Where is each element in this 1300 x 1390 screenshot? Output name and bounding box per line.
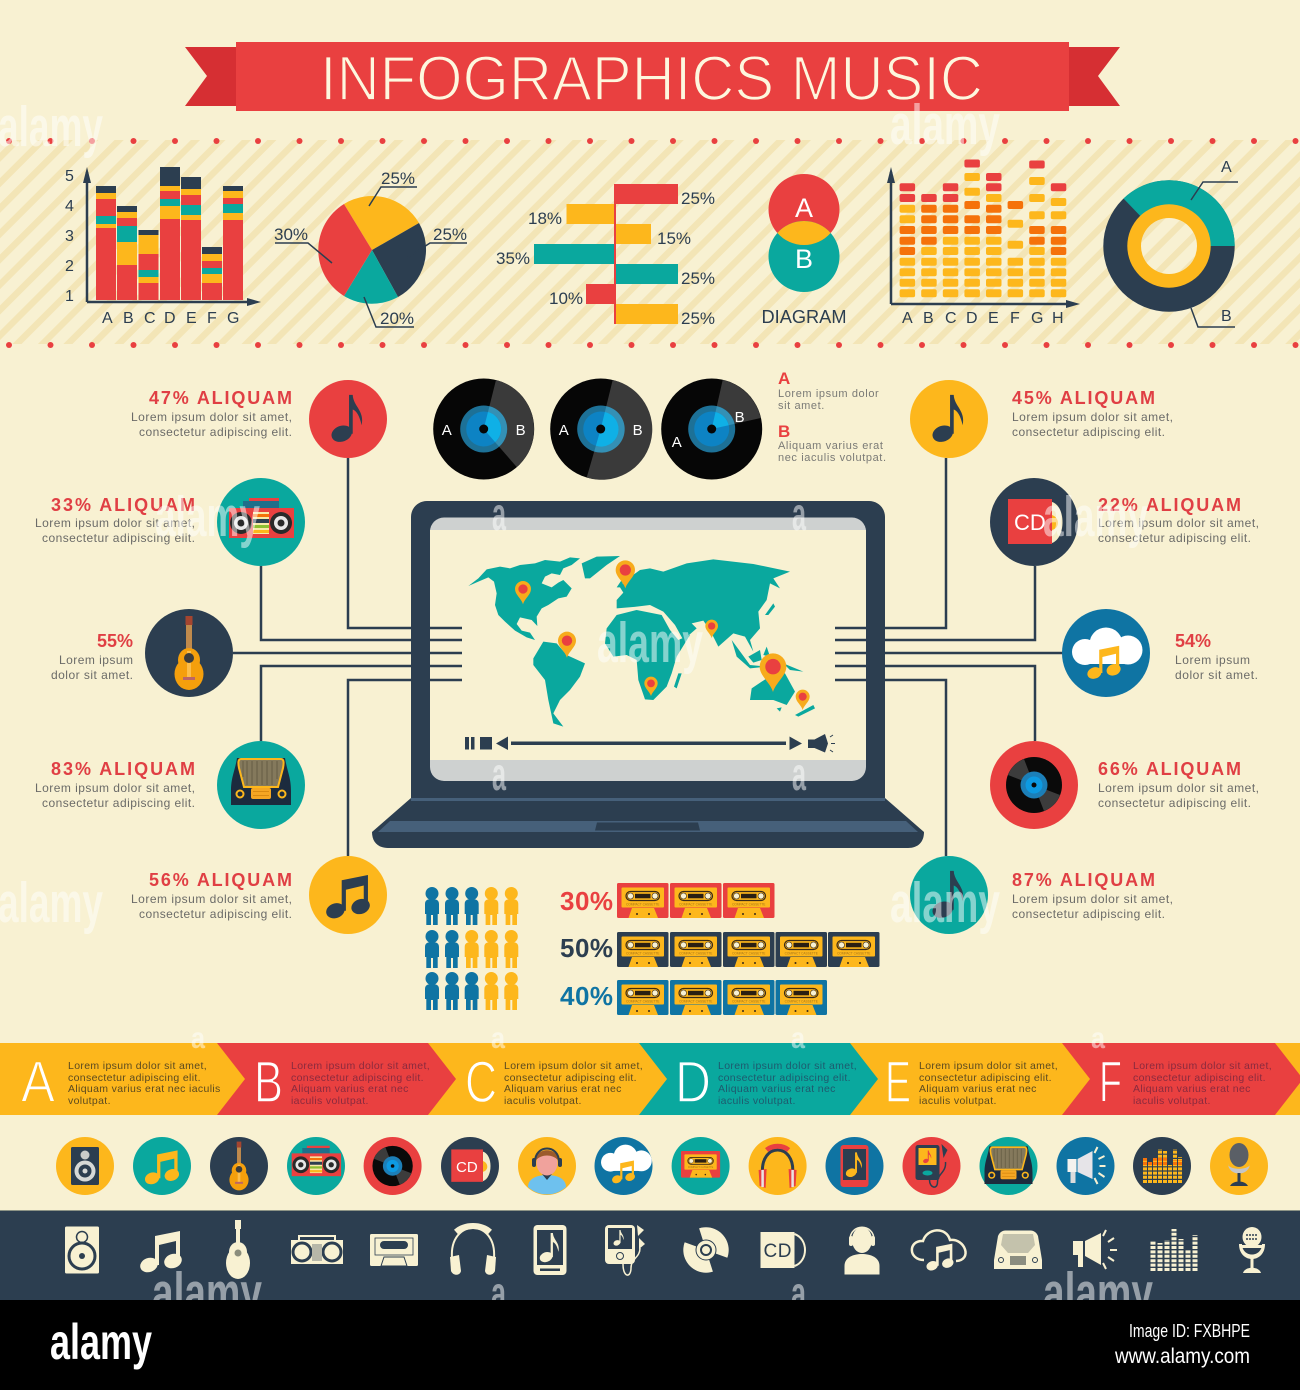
right item 1: 45% ALIQUAM: [1012, 388, 1155, 408]
arrow text F: Aliquam varius erat nec: [1133, 1083, 1251, 1095]
diverging bar chart: 10%: [549, 289, 583, 308]
icon: headphones outline: [450, 1226, 496, 1275]
left item 4: consectetur adipiscing elit.: [42, 796, 195, 810]
icon: music notes: [143, 1150, 181, 1186]
stacked bar chart: 3: [65, 228, 74, 245]
icon: person: [528, 1148, 566, 1194]
cassette row 30%: [560, 883, 774, 918]
arrow band A-F: B: [254, 1050, 283, 1115]
vinyl comparison discs: [433, 378, 762, 480]
stacked bar chart: 2: [65, 258, 74, 275]
vinyl 3: A: [672, 434, 682, 451]
icon: radio outline: [994, 1230, 1042, 1269]
stock watermarks: [0, 93, 1153, 1325]
equalizer chart: [887, 160, 1080, 327]
icon: cassette outline: [370, 1234, 418, 1266]
stock watermarks: a: [1091, 1022, 1105, 1055]
arrow band A-F: F: [1099, 1050, 1122, 1115]
laptop screen: [430, 518, 866, 781]
donut chart: B: [1221, 308, 1232, 325]
diverging bar chart: 18%: [528, 209, 562, 228]
stacked bar chart: B: [123, 310, 134, 327]
icon: megaphone outline: [1073, 1230, 1117, 1269]
icon: microphone outline: [1239, 1227, 1265, 1273]
vinyl legend text: Lorem ipsum dolor: [778, 388, 879, 400]
stock watermarks: a: [791, 1267, 806, 1319]
cassette row 50%: [560, 932, 880, 967]
equalizer chart: A: [902, 310, 913, 327]
right item 3: dolor sit amet.: [1175, 668, 1258, 682]
arrow text C: iaculis volutpat.: [504, 1095, 582, 1107]
icon: speaker: [71, 1147, 99, 1185]
icon: disc outline: [683, 1227, 729, 1273]
icon: cloud outline: [912, 1230, 966, 1272]
right item 1: consectetur adipiscing elit.: [1012, 425, 1165, 439]
stacked bar chart: D: [164, 310, 176, 327]
left item 1: 47% ALIQUAM: [149, 388, 292, 408]
left item 5: 56% ALIQUAM: [149, 870, 292, 890]
cassette row 40%: 40%: [560, 981, 613, 1011]
cassette rows: [560, 883, 880, 1015]
arrow text F: [1133, 1060, 1272, 1107]
stock watermarks: a: [491, 1022, 505, 1055]
stock watermarks: alamy: [597, 611, 703, 675]
arrow text A: Aliquam varius erat nec iaculis: [68, 1083, 221, 1095]
right item 4: consectetur adipiscing elit.: [1098, 796, 1251, 810]
icon: equalizer outline: [1153, 1229, 1195, 1271]
vinyl 2: A: [559, 422, 569, 439]
diverging bar chart: 25%: [681, 269, 715, 288]
icon: vinyl: [372, 1146, 413, 1186]
arrow text C: [504, 1060, 643, 1107]
icon: person outline: [844, 1227, 880, 1274]
stock watermarks: a: [491, 1267, 506, 1319]
icon: cloud music: [601, 1145, 652, 1185]
right item 4: Lorem ipsum dolor sit amet,: [1098, 781, 1259, 795]
footer bar: www.alamy.com: [1114, 1345, 1250, 1368]
arrow text C: consectetur adipiscing elit.: [504, 1072, 637, 1084]
stacked bar chart: [65, 167, 261, 327]
left item 5: Lorem ipsum dolor sit amet,: [131, 892, 292, 906]
donut chart: [1103, 159, 1238, 327]
equalizer chart: G: [1031, 310, 1043, 327]
vinyl 3: B: [735, 409, 745, 426]
colored icon row: [56, 1137, 1268, 1195]
stacked bar chart: 4: [65, 198, 74, 215]
stock watermarks: alamy: [1043, 485, 1148, 549]
footer bar: alamy: [50, 1314, 152, 1370]
vinyl 2: B: [633, 422, 643, 439]
arrow text B: Lorem ipsum dolor sit amet,: [291, 1060, 430, 1072]
icon: CD sleeve outline: CD: [764, 1241, 792, 1262]
right item 5: 87% ALIQUAM: [1012, 870, 1155, 890]
icon: music player: [916, 1144, 948, 1187]
donut chart: A: [1221, 159, 1232, 176]
icon: boombox: [292, 1146, 341, 1176]
laptop base: [372, 798, 924, 848]
stock watermarks: alamy: [1043, 1261, 1153, 1325]
vinyl legend text: nec iaculis volutpat.: [778, 452, 887, 464]
laptop lid: [411, 501, 885, 798]
right item 2: 22% ALIQUAM: [1098, 495, 1241, 515]
right item 4: 66% ALIQUAM: [1098, 759, 1241, 779]
venn diagram: [762, 174, 846, 327]
stacked bar chart: G: [227, 310, 239, 327]
vinyl legend text: B: [778, 422, 790, 441]
right item 3: 54%: [1175, 631, 1211, 651]
arrow band A-F: D: [675, 1050, 711, 1115]
cassette row 30%: 30%: [560, 886, 613, 916]
arrow text A: volutpat.: [68, 1095, 111, 1107]
arrow text D: iaculis volutpat.: [718, 1095, 796, 1107]
media player controls: [465, 734, 835, 752]
vinyl legend text: sit amet.: [778, 400, 825, 412]
arrow band A-F: A: [21, 1050, 55, 1115]
left item 3: dolor sit amet.: [51, 668, 133, 682]
arrow band A-F: E: [885, 1050, 911, 1115]
right item 2: Lorem ipsum dolor sit amet,: [1098, 516, 1259, 530]
equalizer chart: E: [988, 310, 999, 327]
pie chart: [274, 169, 467, 328]
arrow text E: iaculis volutpat.: [919, 1095, 997, 1107]
people pictogram: [425, 887, 518, 1010]
arrow text F: Lorem ipsum dolor sit amet,: [1133, 1060, 1272, 1072]
stock watermarks: alamy: [890, 93, 1000, 157]
right item 2: CD: [1014, 510, 1046, 535]
stock watermarks: alamy: [152, 1261, 262, 1325]
icon: microphone: [1228, 1143, 1250, 1186]
icon: notes outline: [138, 1231, 184, 1275]
laptop with world map: [372, 501, 924, 848]
arrow text E: [919, 1060, 1058, 1107]
left item 3: Lorem ipsum: [59, 653, 133, 667]
equalizer chart: D: [966, 310, 978, 327]
cassette row 50%: 50%: [560, 933, 613, 963]
pie chart: 25%: [381, 169, 415, 188]
right item 5: Lorem ipsum dolor sit amet,: [1012, 892, 1173, 906]
left item 4: Lorem ipsum dolor sit amet,: [35, 781, 195, 795]
arrow text A: [68, 1060, 221, 1107]
equalizer chart: C: [945, 310, 957, 327]
arrow text B: consectetur adipiscing elit.: [291, 1072, 424, 1084]
arrow text E: Aliquam varius erat nec: [919, 1083, 1037, 1095]
arrow text E: Lorem ipsum dolor sit amet,: [919, 1060, 1058, 1072]
arrow text D: [718, 1060, 857, 1107]
vinyl legend text: [778, 369, 887, 464]
left item 4: 83% ALIQUAM: [51, 759, 195, 779]
vinyl 1: [433, 378, 534, 480]
left item 5: [131, 856, 387, 934]
stacked bar chart: 1: [65, 288, 74, 305]
connector lines: [233, 458, 1063, 856]
stacked bar chart: C: [144, 310, 156, 327]
footer bar: Image ID: FXBHPE: [1129, 1321, 1250, 1341]
diverging bar chart: 25%: [681, 309, 715, 328]
stacked bar chart: E: [186, 310, 197, 327]
stock watermarks: alamy: [155, 485, 260, 549]
icon: CD sleeve outline: [760, 1232, 805, 1268]
icon: CD sleeve: [451, 1149, 491, 1182]
vinyl legend text: A: [778, 369, 790, 388]
icon: guitar: [229, 1142, 249, 1190]
stock watermarks: a: [492, 748, 506, 800]
diverging bar chart: 35%: [496, 249, 530, 268]
arrow band A-F: [0, 1043, 1300, 1115]
left item 1: Lorem ipsum dolor sit amet,: [131, 410, 292, 424]
icon: radio: [984, 1146, 1032, 1184]
arrow text D: consectetur adipiscing elit.: [718, 1072, 851, 1084]
stock watermarks: a: [191, 1022, 205, 1055]
arrow text A: consectetur adipiscing elit.: [68, 1072, 201, 1084]
left item 1: consectetur adipiscing elit.: [139, 425, 292, 439]
arrow text F: consectetur adipiscing elit.: [1133, 1072, 1266, 1084]
arrow text D: Lorem ipsum dolor sit amet,: [718, 1060, 857, 1072]
striped chart band: [0, 138, 1300, 348]
stacked bar chart: F: [207, 310, 217, 327]
vinyl legend text: Aliquam varius erat: [778, 440, 884, 452]
diverging bar chart: 25%: [681, 189, 715, 208]
diverging bar chart: [496, 184, 715, 328]
icon: boombox outline: [291, 1236, 343, 1264]
right item 2: [990, 478, 1259, 566]
right item 4: [990, 741, 1259, 829]
vinyl 1: B: [516, 422, 526, 439]
stacked bar chart: 5: [65, 168, 74, 185]
venn diagram: B: [795, 244, 813, 274]
icon: phone outline: [534, 1225, 566, 1275]
vinyl 2: [550, 378, 652, 480]
right item 5: [910, 856, 1173, 934]
left item 1: [131, 380, 387, 458]
right item 2: consectetur adipiscing elit.: [1098, 531, 1251, 545]
dark icon band: [0, 1210, 1300, 1301]
equalizer chart: F: [1010, 310, 1020, 327]
stock watermarks: a: [791, 1022, 805, 1055]
footer bar: [0, 1300, 1300, 1390]
arrow text B: Aliquam varius erat nec: [291, 1083, 409, 1095]
diverging bar chart: 15%: [657, 229, 691, 248]
left item 2: consectetur adipiscing elit.: [42, 531, 195, 545]
stock watermarks: a: [492, 488, 506, 540]
left item 5: consectetur adipiscing elit.: [139, 907, 292, 921]
icon: player outline: [605, 1225, 645, 1275]
world map: [468, 556, 815, 727]
left item 3: 55%: [97, 631, 133, 651]
icon: CD sleeve: CD: [456, 1159, 478, 1176]
map pins: [515, 560, 810, 710]
venn diagram: DIAGRAM: [762, 307, 846, 327]
stacked bar chart: A: [102, 310, 113, 327]
stock watermarks: alamy: [0, 95, 103, 159]
icon: cassette: [681, 1151, 720, 1178]
icon: guitar outline: [226, 1220, 250, 1279]
cassette row 40%: [560, 980, 827, 1015]
vinyl 3: [661, 378, 762, 480]
stock watermarks: alamy: [890, 871, 1000, 935]
pie chart: 25%: [433, 225, 467, 244]
right item 1: [910, 380, 1173, 458]
venn diagram: A: [795, 193, 813, 223]
right item 3: [1062, 609, 1258, 697]
icon: equalizer: [1145, 1149, 1180, 1183]
pie chart: 30%: [274, 225, 308, 244]
right item 5: consectetur adipiscing elit.: [1012, 907, 1165, 921]
icon: speaker outline: [65, 1226, 99, 1274]
arrow text C: Aliquam varius erat nec: [504, 1083, 622, 1095]
title ribbon: [185, 42, 1120, 114]
arrow text E: consectetur adipiscing elit.: [919, 1072, 1052, 1084]
stock watermarks: a: [792, 488, 806, 540]
stock watermarks: a: [792, 748, 806, 800]
left item 3: [51, 609, 233, 697]
title text: INFOGRAPHICS MUSIC: [320, 44, 983, 114]
arrow text F: iaculis volutpat.: [1133, 1095, 1211, 1107]
pie chart: 20%: [380, 309, 414, 328]
arrow text C: Lorem ipsum dolor sit amet,: [504, 1060, 643, 1072]
arrow text D: Aliquam varius erat nec: [718, 1083, 836, 1095]
left item 2: 33% ALIQUAM: [51, 495, 195, 515]
icon: megaphone: [1068, 1147, 1106, 1184]
arrow text B: [291, 1060, 430, 1107]
right item 1: Lorem ipsum dolor sit amet,: [1012, 410, 1173, 424]
stock watermarks: alamy: [0, 871, 103, 935]
left item 2: Lorem ipsum dolor sit amet,: [35, 516, 195, 530]
equalizer chart: H: [1052, 310, 1064, 327]
left item 4: [35, 741, 305, 829]
vinyl 1: A: [442, 422, 452, 439]
arrow text B: iaculis volutpat.: [291, 1095, 369, 1107]
right item 3: Lorem ipsum: [1175, 653, 1250, 667]
equalizer chart: B: [923, 310, 934, 327]
left item 2: [35, 478, 305, 566]
icon: headphones: [759, 1146, 797, 1188]
icon: phone: [840, 1145, 868, 1187]
arrow band A-F: C: [465, 1050, 497, 1115]
arrow text A: Lorem ipsum dolor sit amet,: [68, 1060, 207, 1072]
